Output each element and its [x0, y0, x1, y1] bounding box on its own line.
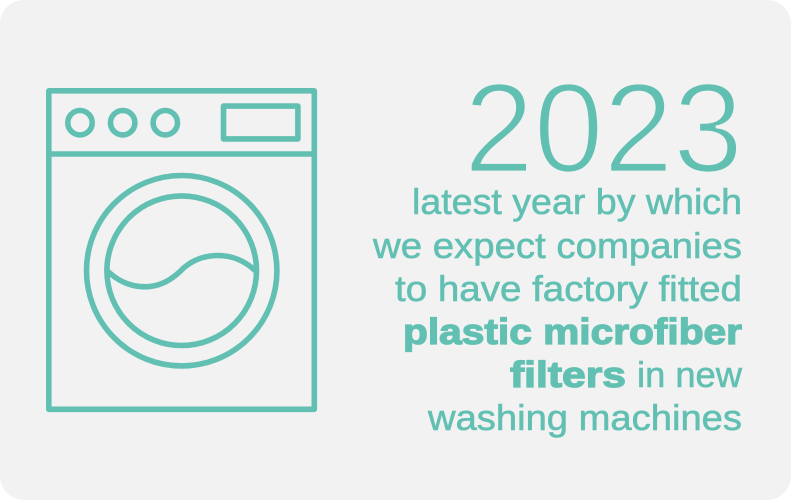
line 2: we expect companies [372, 225, 742, 266]
icon: washing machine [49, 91, 314, 409]
line 1: latest year by which [412, 181, 742, 222]
machine body [49, 91, 314, 409]
control knobs [68, 110, 178, 135]
door outer ring [86, 176, 277, 366]
display window [224, 106, 298, 139]
line 5 bold: filters [510, 354, 626, 395]
control panel divider [49, 151, 314, 157]
line 6: washing machines [427, 397, 742, 438]
door inner ring [107, 196, 256, 346]
description text [372, 181, 743, 438]
line 5 regular: in new [637, 354, 743, 395]
water wave [108, 256, 255, 287]
line 4 bold: plastic microfiber [403, 311, 742, 352]
year headline: 2023 [464, 57, 743, 199]
line 3: to have factory fitted [395, 268, 742, 309]
